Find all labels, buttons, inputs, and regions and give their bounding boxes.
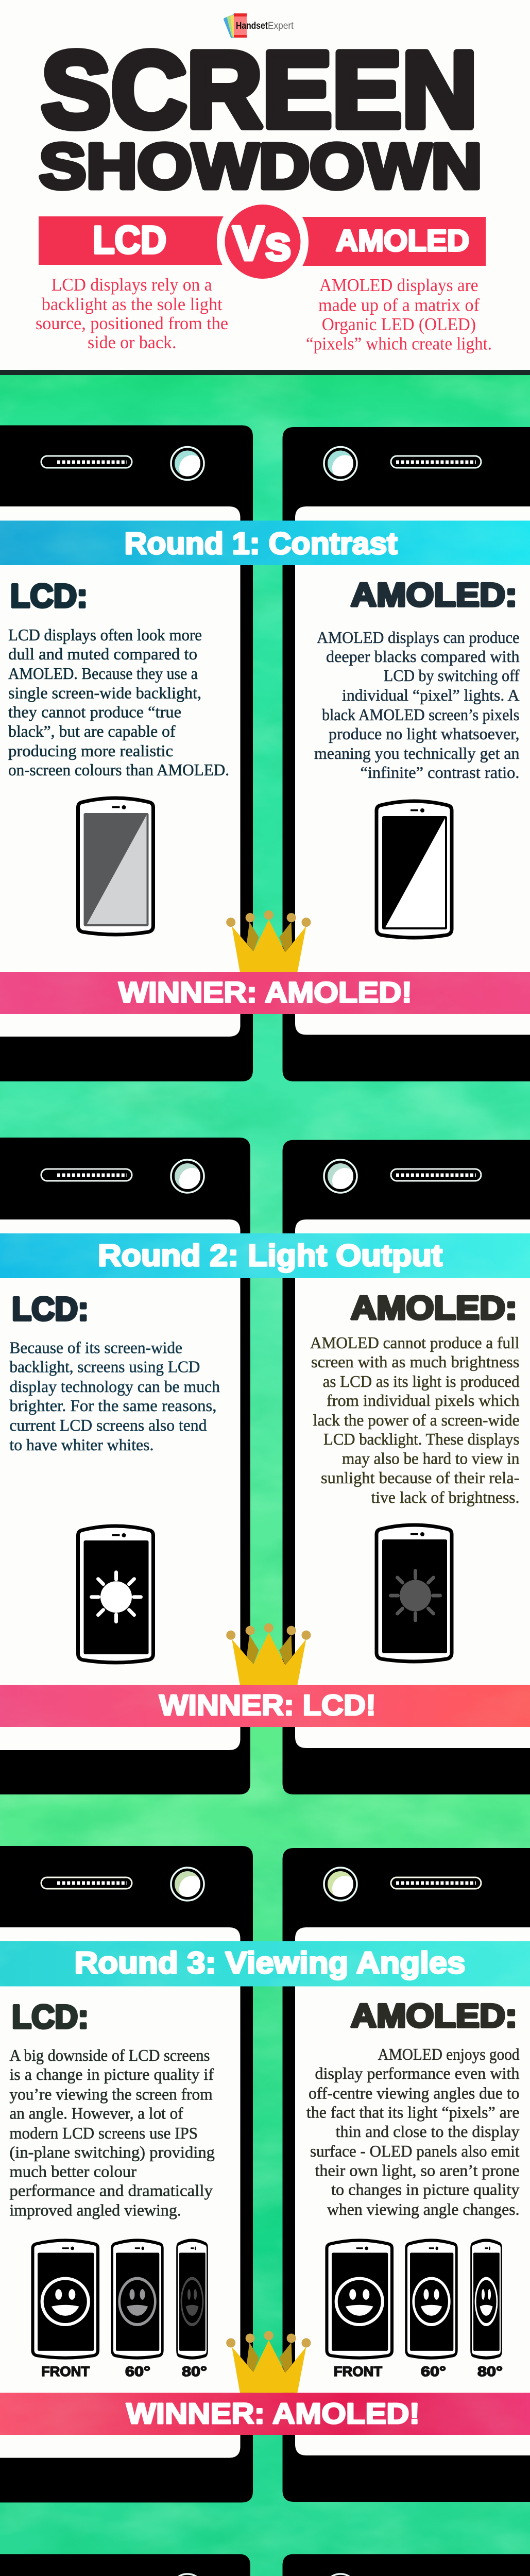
phone panel: AMOLED round 1 <box>282 427 530 1081</box>
intro text: LCD: source, positioned from the <box>36 313 228 333</box>
logo: HandsetExpert: Handset <box>236 21 268 31</box>
winner band: round 2 <box>0 1685 530 1727</box>
body text: AMOLED viewing angles: AMOLED enjoys good <box>378 2045 519 2063</box>
label: 80 degrees: 80° <box>182 2364 207 2379</box>
phone panel: AMOLED round 4 <box>282 2554 530 2576</box>
body text: LCD viewing angles: improved angled viewing. <box>9 2201 181 2219</box>
heading band: Round 2: Round 2: Light Output <box>98 1239 442 1273</box>
body text: LCD viewing angles: an angle. However, a lot of <box>9 2104 183 2123</box>
winner band: round 3 <box>0 2393 530 2435</box>
versus banner: Vs <box>232 216 292 271</box>
icon: crown round 2 <box>226 1623 311 1685</box>
winner band: round 2: WINNER: LCD! <box>159 1689 376 1721</box>
versus banner: AMOLED <box>336 224 469 258</box>
heading band: Round 1: Round 1: Contrast <box>125 527 398 561</box>
label: FRONT: FRONT <box>41 2364 90 2379</box>
intro text: AMOLED: AMOLED displays are <box>319 275 478 295</box>
body text: AMOLED light output: AMOLED cannot produce a full <box>310 1333 520 1352</box>
round 1 <box>0 426 530 1081</box>
icon: crown round 1 <box>226 910 311 972</box>
body text: AMOLED contrast: black AMOLED screen’s pixels <box>322 705 519 724</box>
intro text: LCD: backlight as the sole light <box>42 294 223 314</box>
icon: AMOLED phone dim sun <box>377 1525 452 1662</box>
phone panel: AMOLED round 2 <box>282 1140 530 1794</box>
body text: AMOLED light output: from individual pixels which <box>327 1391 519 1410</box>
icon: LCD phone 80 degrees <box>177 2240 207 2358</box>
heading band: Round 3 <box>0 1941 530 1987</box>
intro text: AMOLED: “pixels” which create light. <box>306 334 492 354</box>
body text: LCD contrast: LCD displays often look more <box>8 625 202 644</box>
title: SHOWDOWN <box>39 131 482 202</box>
body text: AMOLED light output: LCD backlight. These displays <box>323 1430 519 1448</box>
body text: AMOLED contrast: AMOLED displays can produce <box>317 628 519 647</box>
phone panel: LCD round 2 <box>0 1138 250 1794</box>
body text: LCD contrast: single screen-wide backlight, <box>8 683 201 702</box>
winner band: round 1: WINNER: AMOLED! <box>118 976 412 1009</box>
winner band: round 3: WINNER: AMOLED! <box>126 2397 420 2430</box>
logo: HandsetExpert: Expert <box>268 21 294 31</box>
body text: LCD light output: display technology can be much <box>9 1377 220 1396</box>
body text: AMOLED contrast <box>314 628 520 782</box>
icon: AMOLED phone front <box>327 2240 392 2358</box>
body text: LCD contrast: producing more realistic <box>8 741 173 760</box>
icon: LCD phone grey contrast <box>78 798 153 935</box>
heading band: Round 1 <box>0 520 530 565</box>
round 4 <box>0 2554 530 2576</box>
body text: AMOLED viewing angles: thin and close to the display <box>336 2122 519 2141</box>
body text: LCD contrast: they cannot produce “true <box>8 703 181 721</box>
heading: LCD: LCD: <box>12 1998 89 2035</box>
label: FRONT: FRONT <box>334 2364 383 2379</box>
intro text: LCD: side or back. <box>88 332 176 352</box>
body text: LCD viewing angles: is a change in picture quality if <box>9 2065 214 2083</box>
body text: LCD contrast <box>8 625 229 779</box>
heading band: Round 3: Round 3: Viewing Angles <box>74 1946 466 1980</box>
heading: LCD: LCD: <box>10 577 88 614</box>
body text: AMOLED viewing angles: surface - OLED panels also emit <box>310 2142 520 2160</box>
winner band: round 1 <box>0 972 530 1014</box>
body text: LCD light output: brighter. For the same reasons, <box>9 1396 216 1415</box>
body text: LCD viewing angles: you’re viewing the screen from <box>9 2085 213 2104</box>
heading: AMOLED: AMOLED: <box>351 576 517 613</box>
intro text: LCD <box>36 275 228 352</box>
body text: LCD viewing angles: much better colour <box>9 2162 136 2180</box>
body text: LCD light output: current LCD screens also tend <box>9 1416 207 1434</box>
body text: AMOLED contrast: LCD by switching off <box>384 666 520 685</box>
icon: LCD phone 60 degrees <box>112 2240 162 2358</box>
body text: AMOLED contrast: deeper blacks compared with <box>326 647 519 666</box>
body text: AMOLED viewing angles <box>306 2045 520 2218</box>
body text: LCD viewing angles: (in-plane switching) providing <box>9 2143 215 2161</box>
title: SCREEN <box>41 30 477 150</box>
body text: LCD viewing angles: A big downside of LCD screens <box>9 2046 210 2064</box>
body text: LCD contrast: black”, but are capable of <box>8 722 176 740</box>
phone panel: LCD round 4 <box>0 2554 250 2576</box>
heading: AMOLED: AMOLED: <box>351 1289 517 1326</box>
label: 80 degrees: 80° <box>477 2364 503 2379</box>
phone panel: LCD round 1 <box>0 426 253 1081</box>
body text: AMOLED light output: tive lack of brightness. <box>371 1488 519 1506</box>
body text: AMOLED viewing angles: their own light, so aren’t prone <box>315 2161 519 2179</box>
label: 60 degrees: 60° <box>125 2364 150 2379</box>
versus banner <box>39 193 486 291</box>
body text: LCD viewing angles: modern LCD screens use IPS <box>9 2124 198 2142</box>
logo: HandsetExpert <box>223 13 294 39</box>
icon: LCD phone bright sun <box>78 1526 153 1663</box>
heading band: Round 2 <box>0 1233 530 1278</box>
intro text: AMOLED <box>306 275 492 354</box>
body text: AMOLED light output: may also be hard to view in <box>342 1449 519 1467</box>
round 3 <box>0 1846 530 2502</box>
body text: AMOLED viewing angles: when viewing angle changes. <box>327 2200 519 2218</box>
body text: LCD light output: to have whiter whites. <box>9 1435 153 1454</box>
body text: LCD contrast: on-screen colours than AMOLED. <box>8 760 229 779</box>
icon: crown round 3 <box>226 2331 311 2393</box>
body text: LCD light output: Because of its screen-wide <box>9 1338 182 1357</box>
heading: LCD: LCD: <box>12 1290 89 1327</box>
body text: LCD contrast: dull and muted compared to <box>8 645 197 663</box>
icon: AMOLED phone black contrast <box>377 801 452 938</box>
body text: AMOLED contrast: “infinite” contrast ratio. <box>361 763 519 782</box>
body text: AMOLED light output: sunlight because of their rela- <box>321 1468 519 1487</box>
icon: AMOLED phone 80 degrees <box>471 2240 501 2358</box>
body text: LCD contrast: AMOLED. Because they use a <box>8 664 198 683</box>
body text: AMOLED light output: lack the power of a screen-wide <box>313 1411 520 1429</box>
body text: AMOLED light output <box>310 1333 520 1506</box>
icon: LCD phone front <box>32 2240 98 2358</box>
icon: AMOLED phone 60 degrees <box>406 2240 456 2358</box>
body text: LCD viewing angles: performance and dramatically <box>9 2181 213 2200</box>
body text: AMOLED contrast: individual “pixel” lights. A <box>342 686 519 704</box>
body text: AMOLED contrast: meaning you technically get an <box>314 744 519 762</box>
body text: AMOLED viewing angles: the fact that its light “pixels” are <box>306 2103 519 2122</box>
body text: LCD light output: backlight, screens using LCD <box>9 1358 200 1376</box>
body text: AMOLED contrast: produce no light whatsoever, <box>329 724 519 743</box>
phone panel: AMOLED round 3 <box>282 1848 530 2502</box>
body text: AMOLED viewing angles: display performance even with <box>315 2064 519 2082</box>
intro text: AMOLED: Organic LED (OLED) <box>322 314 476 334</box>
heading: AMOLED: AMOLED: <box>351 1997 517 2034</box>
body text: AMOLED viewing angles: off-centre viewing angles due to <box>309 2084 519 2103</box>
versus banner: LCD <box>93 218 166 262</box>
title <box>39 30 482 202</box>
body text: AMOLED light output: screen with as much brightness <box>311 1352 519 1371</box>
body text: LCD light output <box>9 1338 220 1454</box>
intro text: LCD: LCD displays rely on a <box>52 275 212 295</box>
round 2 <box>0 1138 530 1794</box>
phone panel: LCD round 3 <box>0 1846 253 2502</box>
body text: AMOLED viewing angles: to changes in picture quality <box>331 2180 519 2199</box>
body text: AMOLED light output: as LCD as its light is produced <box>323 1372 520 1391</box>
label: 60 degrees: 60° <box>421 2364 446 2379</box>
intro text: AMOLED: made up of a matrix of <box>318 295 480 315</box>
body text: LCD viewing angles <box>9 2046 215 2219</box>
